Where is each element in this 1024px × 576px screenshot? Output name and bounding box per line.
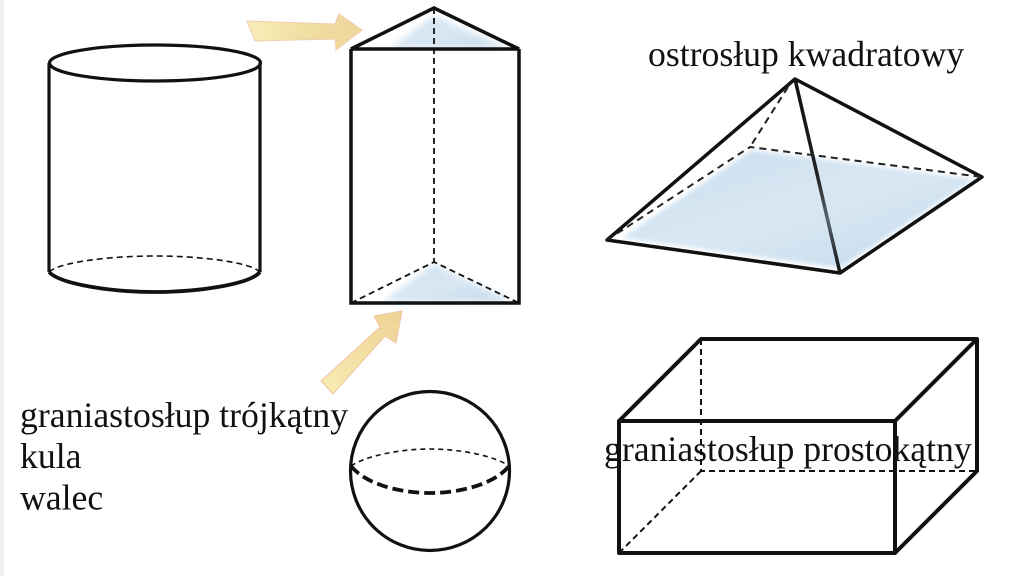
rectangular cuboid bbox=[619, 339, 977, 553]
label: graniastosłup trójkątny: graniastosłup trójkątny bbox=[20, 395, 348, 435]
square pyramid bbox=[607, 79, 982, 273]
triangular prism bbox=[351, 8, 519, 303]
label: walec: walec bbox=[20, 478, 103, 518]
sphere bbox=[350, 392, 510, 550]
label: graniastosłup prostokątny: graniastosłup prostokątny bbox=[604, 429, 972, 469]
label: kula: kula bbox=[20, 436, 82, 476]
cylinder bbox=[49, 45, 260, 292]
video edge strip bbox=[0, 0, 4, 576]
arrow: top bbox=[247, 14, 362, 50]
label: ostrosłup kwadratowy: ostrosłup kwadratowy bbox=[648, 34, 964, 74]
arrow: bottom bbox=[321, 311, 402, 394]
label list bbox=[20, 395, 348, 518]
